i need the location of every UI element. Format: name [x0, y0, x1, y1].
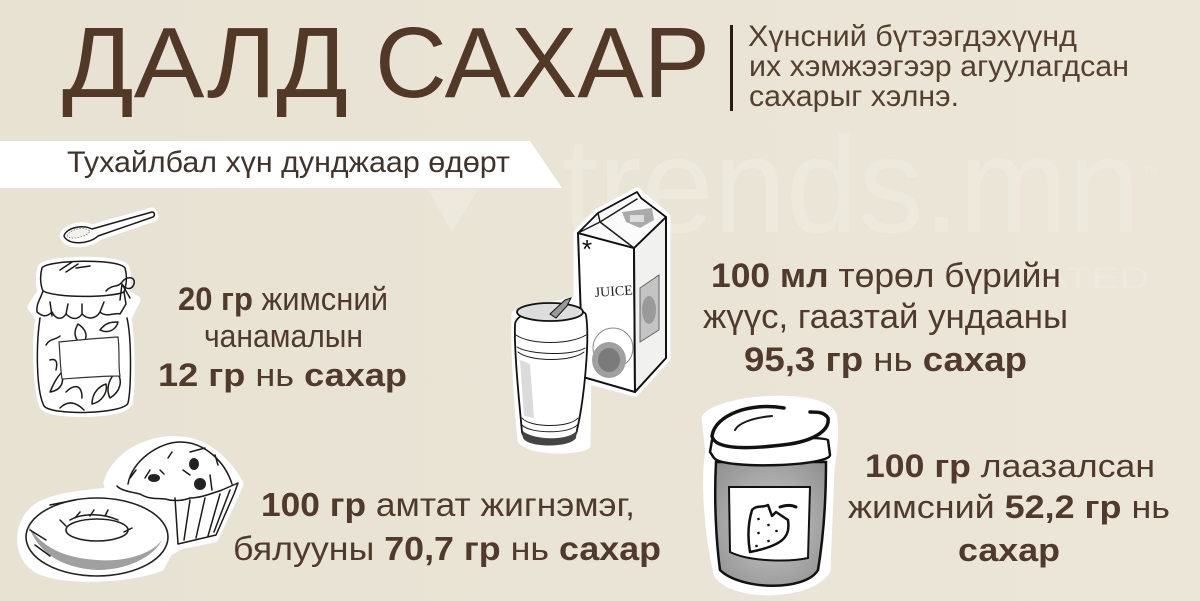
- text: juice and soda: жүүс, гаазтай ундааны: [703, 298, 1068, 336]
- icon: juice carton and can: [515, 192, 666, 449]
- text: canned fruit: 100 гр лаазалсан: [865, 448, 1155, 484]
- icon: juice carton and can: *: [582, 234, 592, 264]
- text: baked goods: [233, 486, 661, 567]
- watermark: ATED: [1040, 262, 1150, 295]
- text: fruit jam: 12 гр нь сахар: [158, 357, 407, 393]
- watermark: ™: [1143, 165, 1159, 182]
- text: juice and soda: [703, 257, 1068, 379]
- icon: fruit preserve jar: [32, 261, 136, 412]
- title: ДАЛД: [62, 7, 348, 119]
- title: [62, 7, 710, 119]
- watermark: trends.mn: [562, 109, 1140, 261]
- text: canned fruit: сахар: [958, 532, 1060, 568]
- definition text: [748, 20, 1129, 113]
- text: juice and soda: 95,3 гр нь сахар: [744, 341, 1027, 379]
- definition text: их хэмжээгээр агуулагдсан: [749, 50, 1129, 83]
- text: fruit jam: [158, 281, 407, 393]
- definition text: сахарыг хэлнэ.: [749, 80, 959, 113]
- definition text: Хүнсний бүтээгдэхүүнд: [748, 20, 1077, 53]
- ribbon banner: [0, 141, 562, 188]
- text: canned fruit: жимсний 52,2 гр нь: [848, 489, 1170, 525]
- icon: juice carton and can: JUICE: [594, 283, 633, 301]
- text: juice and soda: 100 мл төрөл бүрийн: [711, 257, 1061, 295]
- watermark: [428, 109, 1159, 295]
- ribbon banner: Тухайлбал хүн дунджаар өдөрт: [67, 146, 510, 179]
- text: fruit jam: 20 гр жимсний: [178, 281, 388, 317]
- divider: [730, 25, 733, 111]
- icon: muffin and donut: [22, 441, 239, 577]
- text: canned fruit: [848, 448, 1170, 568]
- icon: canned strawberry jar: [706, 400, 834, 591]
- text: fruit jam: чанамалын: [204, 318, 363, 354]
- text: baked goods: бялууны 70,7 гр нь сахар: [233, 530, 661, 567]
- title: САХАР: [375, 7, 710, 119]
- text: baked goods: 100 гр амтат жигнэмэг,: [261, 486, 635, 523]
- icon: sugar spoon: [64, 212, 154, 243]
